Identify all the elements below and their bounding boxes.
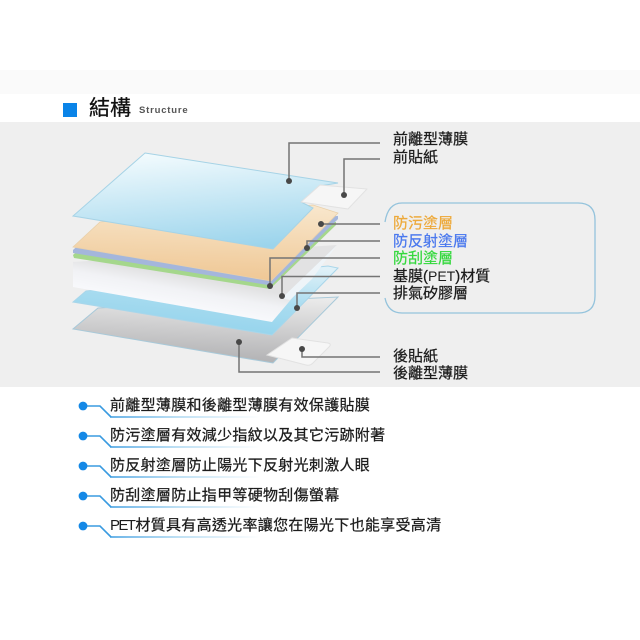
layer: back sticker — [267, 338, 330, 365]
label: PET base film: 基膜(PET)材質 — [393, 268, 490, 285]
bullet text 5: PET材質具有高透光率讓您在陽光下也能享受高清 — [110, 517, 441, 534]
label: anti-reflective coating: 防反射塗層 — [393, 233, 468, 250]
layer: back release film — [73, 297, 338, 363]
label: front sticker: 前貼紙 — [393, 149, 438, 166]
bullet dots — [79, 402, 87, 530]
heading subtitle: Structure — [139, 105, 188, 116]
label: back sticker: 後貼紙 — [393, 348, 438, 365]
leader dots — [236, 178, 347, 352]
layer: PET base film — [73, 245, 337, 322]
bullet text 1: 前離型薄膜和後離型薄膜有效保護貼膜 — [110, 397, 370, 414]
bullet text 2: 防污塗層有效減少指紋以及其它污跡附著 — [110, 427, 385, 444]
label: silicone adhesive: 排氣矽膠層 — [393, 285, 468, 302]
label: anti-fingerprint coating: 防污塗層 — [393, 215, 453, 232]
heading: structure — [63, 96, 188, 120]
heading text: 結構 — [89, 97, 131, 120]
layer: anti-fingerprint coating — [73, 205, 338, 281]
icon: blue square — [63, 103, 77, 117]
label: anti-scratch coating: 防刮塗層 — [393, 250, 453, 267]
layer: silicone adhesive — [73, 266, 338, 335]
bullet text 4: 防刮塗層防止指甲等硬物刮傷螢幕 — [110, 487, 340, 504]
layer: anti-scratch coating — [73, 222, 336, 289]
layer: front release film — [73, 153, 338, 249]
layer: anti-reflective coating — [73, 216, 338, 286]
layer: front sticker — [301, 185, 367, 209]
callout bracket box — [385, 203, 595, 313]
leader lines — [239, 143, 380, 372]
panel: structure diagram — [0, 122, 640, 387]
bullet connector lines — [83, 406, 260, 537]
label: back release film: 後離型薄膜 — [393, 365, 468, 382]
bullet text 3: 防反射塗層防止陽光下反射光刺激人眼 — [110, 457, 370, 474]
top band — [0, 70, 640, 94]
label: front release film: 前離型薄膜 — [393, 131, 468, 148]
